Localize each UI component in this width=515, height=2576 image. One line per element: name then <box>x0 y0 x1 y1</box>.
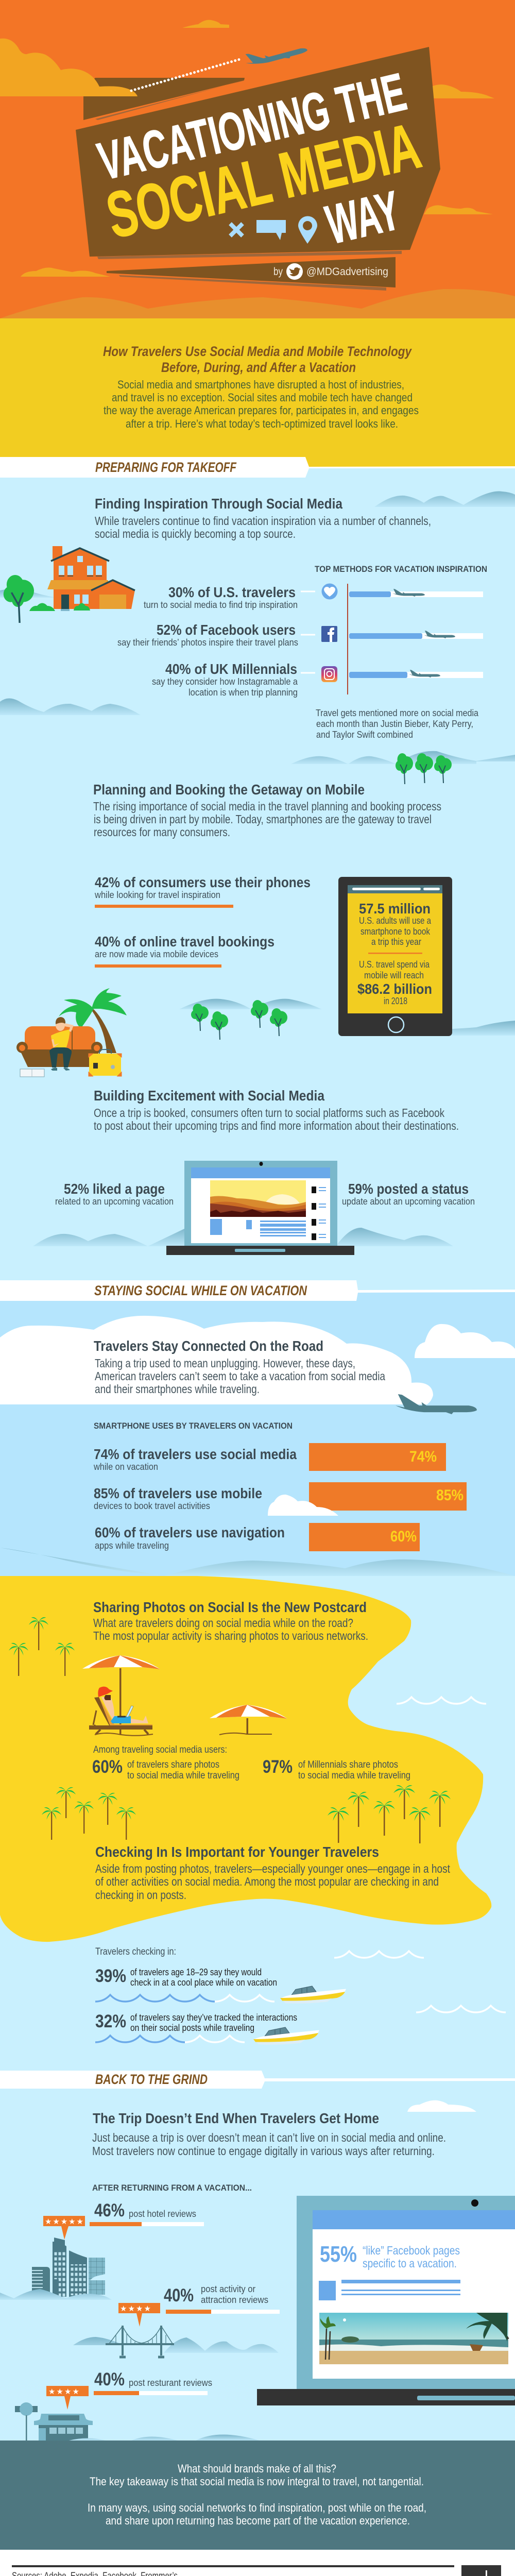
stat: 42 percent: 42% of consumers use their phones <box>95 874 311 890</box>
phone: U.S. travel spend via <box>359 959 430 970</box>
text: building excitement <box>94 1106 459 1132</box>
takeaway text: The key takeaway is that social media is now integral to travel, not tangential. <box>90 2475 424 2488</box>
byline <box>273 263 388 280</box>
stat: 39 percent: 39% <box>95 1966 126 1986</box>
stat: 40 percent bookings: 40% of online travel bookings <box>95 934 274 950</box>
panel: water background <box>0 1576 515 2441</box>
text: planning: resources for many consumers. <box>94 825 230 839</box>
text: among traveling users: Among traveling social media users: <box>93 1744 227 1755</box>
text: travelers stay connected: Taking a trip used to mean unplugging. However, these days, <box>95 1357 355 1370</box>
bar: 85 percent: devices to book travel activities <box>94 1501 210 1511</box>
hills along horizon <box>0 1548 515 1576</box>
icon: facebook <box>321 626 337 642</box>
illustration: bridge <box>106 2326 174 2357</box>
stat: 40 percent bookings: are now made via mobile devices <box>95 949 218 959</box>
stat: 32 percent: on their social posts while traveling <box>130 2023 254 2033</box>
hills right of phone <box>443 1021 515 1036</box>
text: trip does not end: Just because a trip is over doesn’t mean it can’t live on in social media and online. <box>92 2131 446 2144</box>
palms lower right <box>328 1785 451 1843</box>
panel: takeaway <box>0 2441 515 2550</box>
bar: 74 percent: while on vacation <box>93 1462 158 1472</box>
text: checking in: Aside from posting photos, travelers—especially younger ones—engage in a host <box>95 1862 450 1875</box>
stat: 97 percent share photos: to social media while traveling <box>298 1770 410 1781</box>
byline: @MDGadvertising <box>306 266 388 278</box>
phone: U.S. adults will use a <box>359 916 432 926</box>
stat: 39 percent <box>95 1966 346 2004</box>
panel: intro <box>0 318 515 467</box>
icon: plane in header <box>244 38 308 70</box>
connector ticks <box>301 591 315 673</box>
text: planning: is being driven in part by mobile. Today, smartphones are the gateway to travel <box>94 812 432 826</box>
callout: travel mentions: Travel gets mentioned more on social media <box>316 708 479 718</box>
heading: travelers stay connected: Travelers Stay Connected On the Road <box>94 1338 323 1354</box>
stat: 39 percent: of travelers age 18–29 say they would <box>130 1967 262 1977</box>
stat: 46 percent hotel reviews: post hotel reviews <box>129 2209 196 2219</box>
palms upper left <box>9 1617 75 1676</box>
icon: plane <box>396 1394 477 1414</box>
bar: 74 percent: 74% of travelers use social media <box>94 1446 297 1462</box>
takeaway text: In many ways, using social networks to find inspiration, post while on the road, <box>88 2501 426 2514</box>
panel: header <box>0 0 515 318</box>
icon: x <box>230 224 243 236</box>
stat: 46 percent hotel reviews: 46% <box>94 2200 125 2221</box>
illustration: man on couch with palm <box>16 988 127 1077</box>
stat: 40 percent bookings <box>95 934 274 968</box>
stat: 46 percent hotel reviews <box>90 2200 204 2226</box>
stat: 97 percent share photos: of Millennials share photos <box>298 1759 398 1770</box>
axis line <box>347 584 348 694</box>
cloud: large left <box>0 39 138 96</box>
panel: light sky background <box>0 467 515 1291</box>
text: checking in: of other activities on social media. Among the most popular are checking in and <box>95 1875 439 1888</box>
intro text: and travel is no exception. Social sites and mobile tech have changed <box>112 391 413 404</box>
section banner: preparing: PREPARING FOR TAKEOFF <box>95 460 237 475</box>
bar: 74 percent: 74% <box>409 1448 437 1465</box>
stat: 30 percent: 30% of U.S. travelers <box>168 584 296 600</box>
intro text <box>104 378 419 430</box>
tag: four stars restaurant: ★★★★ <box>48 2387 79 2396</box>
tag: four stars: ★★★★ <box>120 2304 151 2313</box>
logo: mdg <box>461 2564 501 2576</box>
icon: tree <box>4 575 34 623</box>
illustration: large laptop <box>257 2196 515 2405</box>
stat: 42 percent: while looking for travel inspiration <box>94 890 220 900</box>
stat: 40 percent: say they consider how Instagramable a <box>152 676 298 687</box>
stat: 59 percent posted <box>342 1181 475 1207</box>
stat: 55 percent <box>320 2242 460 2270</box>
takeaway text: and share upon returning has become part of the vacation experience. <box>106 2514 410 2527</box>
callout: travel mentions: each month than Justin Bieber, Katy Perry, <box>316 719 473 729</box>
text: checking in: checking in on posts. <box>95 1888 186 1902</box>
stat: 52 percent liked: 52% liked a page <box>64 1181 165 1197</box>
chart title: after returning: AFTER RETURNING FROM A VACATION... <box>92 2183 252 2193</box>
text: finding inspiration: social media is quickly becoming a top source. <box>95 527 296 540</box>
bar: 60 percent: apps while traveling <box>95 1540 169 1551</box>
heading: finding inspiration: Finding Inspiration Through Social Media <box>95 496 342 512</box>
phone: mobile will reach <box>364 970 424 980</box>
text: travelers stay connected <box>95 1357 385 1396</box>
heading: sharing photos: Sharing Photos on Social Is the New Postcard <box>93 1599 367 1615</box>
intro heading: How Travelers Use Social Media and Mobile Technology <box>103 344 413 359</box>
panel: back to the grind <box>0 2071 515 2441</box>
ribbon: bottom byline <box>107 257 396 291</box>
hills at bottom <box>69 2435 260 2441</box>
stat: 32 percent <box>95 2011 319 2045</box>
bar: 85 percent: 85% of travelers use mobile <box>94 1485 262 1501</box>
callout: travel mentions <box>316 708 479 740</box>
title: WAY <box>320 179 406 256</box>
palms lower left <box>42 1787 136 1840</box>
text: travelers stay connected: American travelers can’t seem to take a vacation from social media <box>95 1369 385 1383</box>
stat: 40 percent: 40% of UK Millennials <box>165 661 297 677</box>
stat: 40 percent restaurant reviews <box>94 2369 212 2395</box>
bar: 85 percent: 85% <box>436 1487 464 1504</box>
text: trip does not end <box>92 2131 446 2158</box>
section banner: back to the grind <box>0 2071 515 2089</box>
photo: beach <box>319 2313 508 2364</box>
text: planning <box>93 800 441 839</box>
intro text: Social media and smartphones have disrupted a host of industries, <box>117 378 404 391</box>
ribbon: top left <box>83 78 245 120</box>
text: checking in <box>95 1862 450 1902</box>
hills and trees center <box>179 999 322 1040</box>
stat: 40 percent attraction reviews: attraction reviews <box>201 2295 268 2305</box>
tag: four stars restaurant <box>46 2386 89 2410</box>
phone: $86.2 billion <box>357 981 432 997</box>
hills right with trees <box>291 751 515 784</box>
phone: a trip this year <box>371 937 421 947</box>
panel: checking in stats <box>95 1946 506 2045</box>
bar: 30 percent <box>349 589 483 597</box>
stat: 52 percent liked <box>55 1181 174 1207</box>
phone: in 2018 <box>384 996 407 1006</box>
stat: 32 percent: 32% <box>95 2011 126 2031</box>
illustration: umbrella and lounger <box>82 1655 160 1736</box>
stat: 30 percent: turn to social media to find trip inspiration <box>144 600 298 610</box>
stat: 42 percent <box>94 874 311 908</box>
stat: 59 percent posted: update about an upcoming vacation <box>342 1196 475 1207</box>
text: planning: The rising importance of social media in the travel planning and booking process <box>93 800 441 813</box>
stat: 40 percent <box>152 661 298 698</box>
phone <box>338 877 452 1036</box>
chart title: top methods: TOP METHODS FOR VACATION INSPIRATION <box>315 564 487 574</box>
heading: building excitement: Building Excitement with Social Media <box>94 1088 324 1104</box>
hills near bridge <box>73 2337 279 2353</box>
stat: 52 percent <box>117 622 298 648</box>
text: finding inspiration: While travelers continue to find vacation inspiration via a number of channels, <box>95 514 431 528</box>
hills behind house <box>0 589 57 598</box>
text: finding inspiration <box>95 514 431 540</box>
bar: 60 percent: 60% <box>390 1528 417 1545</box>
hills left <box>0 698 141 715</box>
tag: four stars <box>118 2303 160 2327</box>
stat: 60 percent share photos <box>92 1757 239 1781</box>
bar: 85 percent <box>94 1482 467 1511</box>
stat: 52 percent liked: related to an upcoming vacation <box>55 1196 174 1207</box>
section banner: staying social: STAYING SOCIAL WHILE ON VACATION <box>94 1283 307 1298</box>
stat: 55 percent: 55% <box>320 2242 357 2267</box>
stat: 40 percent attraction reviews <box>164 2284 280 2314</box>
title banner <box>76 47 440 259</box>
stat: 30 percent <box>144 584 298 610</box>
heading: checking in: Checking In Is Important for Younger Travelers <box>95 1844 379 1860</box>
phone: 57.5 million <box>359 901 431 917</box>
text: trip does not end: Most travelers now continue to engage digitally in various ways after returning. <box>92 2144 435 2158</box>
bar: 40 percent <box>349 670 483 678</box>
intro text: the way the average American prepares for, participates in, and engages <box>104 404 419 417</box>
bar: 52 percent <box>349 631 483 639</box>
photo: sunset <box>210 1180 306 1217</box>
text: travelers stay connected: and their smartphones while traveling. <box>95 1382 260 1396</box>
stat: 55 percent: specific to a vacation. <box>363 2257 457 2270</box>
cloud: small over bar <box>268 1495 338 1516</box>
hills top right <box>374 492 515 507</box>
phone: smartphone to book <box>360 926 431 937</box>
section banner: back to the grind: BACK TO THE GRIND <box>95 2072 208 2087</box>
text: travelers checking in: Travelers checking in: <box>95 1946 176 1957</box>
section banner: preparing <box>0 457 515 478</box>
stat: 97 percent share photos: 97% <box>263 1757 293 1777</box>
stat: 40 percent restaurant reviews: 40% <box>94 2369 125 2389</box>
cloud: right <box>415 1324 515 1358</box>
stat: 40 percent restaurant reviews: post resturant reviews <box>129 2378 212 2388</box>
cloud: large <box>0 1316 433 1404</box>
text: sharing photos <box>93 1616 368 1642</box>
tag: five stars <box>43 2216 85 2240</box>
stat: 52 percent: say their friends’ photos inspire their travel plans <box>117 637 298 648</box>
illustration: second umbrella <box>210 1705 287 1735</box>
panel: footer <box>0 2550 515 2576</box>
stat: 32 percent: of travelers say they’ve tracked the interactions <box>130 2012 297 2023</box>
byline: by <box>273 266 283 278</box>
stat: 40 percent attraction reviews: 40% <box>164 2285 194 2306</box>
stat: 60 percent share photos: 60% <box>92 1757 123 1777</box>
flight path dots <box>131 59 240 91</box>
cloud: right upper <box>414 84 494 98</box>
illustration: restaurant and sign <box>15 2402 93 2441</box>
icon: speech bubble <box>256 220 286 240</box>
cloud: right lower <box>424 205 493 214</box>
stat: 55 percent: “like” Facebook pages <box>363 2244 460 2257</box>
chart title: smartphone uses: SMARTPHONE USES BY TRAVELERS ON VACATION <box>94 1421 293 1431</box>
takeaway text: What should brands make of all this? <box>178 2462 336 2475</box>
icon: map pin <box>298 216 317 244</box>
text: sharing photos: The most popular activity is sharing photos to various networks. <box>93 1629 368 1642</box>
stat: 52 percent: 52% of Facebook users <box>157 622 296 638</box>
stat: 40 percent attraction reviews: post activity or <box>201 2284 255 2294</box>
bar: 60 percent <box>95 1523 420 1551</box>
intro text: after a trip. Here’s what today’s tech-optimized travel looks like. <box>126 417 398 430</box>
intro heading <box>103 344 413 375</box>
stat: 39 percent: check in at a cool place while on vacation <box>130 1977 277 1988</box>
section banner: staying social <box>0 1280 515 1301</box>
hills behind header <box>0 289 515 318</box>
stat: 97 percent share photos <box>263 1757 410 1781</box>
cloud: top small <box>182 20 229 28</box>
panel: preparing for takeoff <box>0 457 515 1255</box>
takeaway text <box>88 2462 426 2527</box>
stat: 59 percent posted: 59% posted a status <box>348 1181 469 1197</box>
tag: five stars: ★★★★★ <box>45 2217 83 2226</box>
illustration: laptop <box>166 1161 354 1255</box>
text: building excitement: Once a trip is booked, consumers often turn to social platforms such as Facebook <box>94 1106 444 1120</box>
panel: beach <box>0 1576 491 1942</box>
stat: 40 percent: location is when trip planning <box>188 687 298 698</box>
cloud <box>407 2100 476 2112</box>
hills under buildings <box>0 2289 112 2300</box>
illustration: house <box>29 546 135 611</box>
cloud: left lower <box>21 267 110 277</box>
waves decorative <box>334 1951 506 2012</box>
text: sharing photos: What are travelers doing on social media while on the road? <box>93 1616 353 1630</box>
intro heading: Before, During, and After a Vacation <box>161 360 356 375</box>
heading: planning and booking: Planning and Booking the Getaway on Mobile <box>93 782 365 798</box>
bar: 74 percent <box>93 1443 446 1472</box>
icon: heart <box>321 583 338 600</box>
bar: 60 percent: 60% of travelers use navigation <box>95 1524 285 1540</box>
stat: 60 percent share photos: to social media while traveling <box>127 1770 239 1781</box>
hills behind laptop <box>33 1228 453 1246</box>
heading: trip does not end: The Trip Doesn’t End When Travelers Get Home <box>93 2110 379 2126</box>
icon: instagram <box>321 666 337 682</box>
illustration: city buildings <box>32 2238 105 2297</box>
callout: travel mentions: and Taylor Swift combined <box>316 730 413 740</box>
panel: staying social while on vacation <box>0 1280 515 1576</box>
wave <box>397 1697 486 1704</box>
stat: 60 percent share photos: of travelers share photos <box>127 1759 219 1770</box>
